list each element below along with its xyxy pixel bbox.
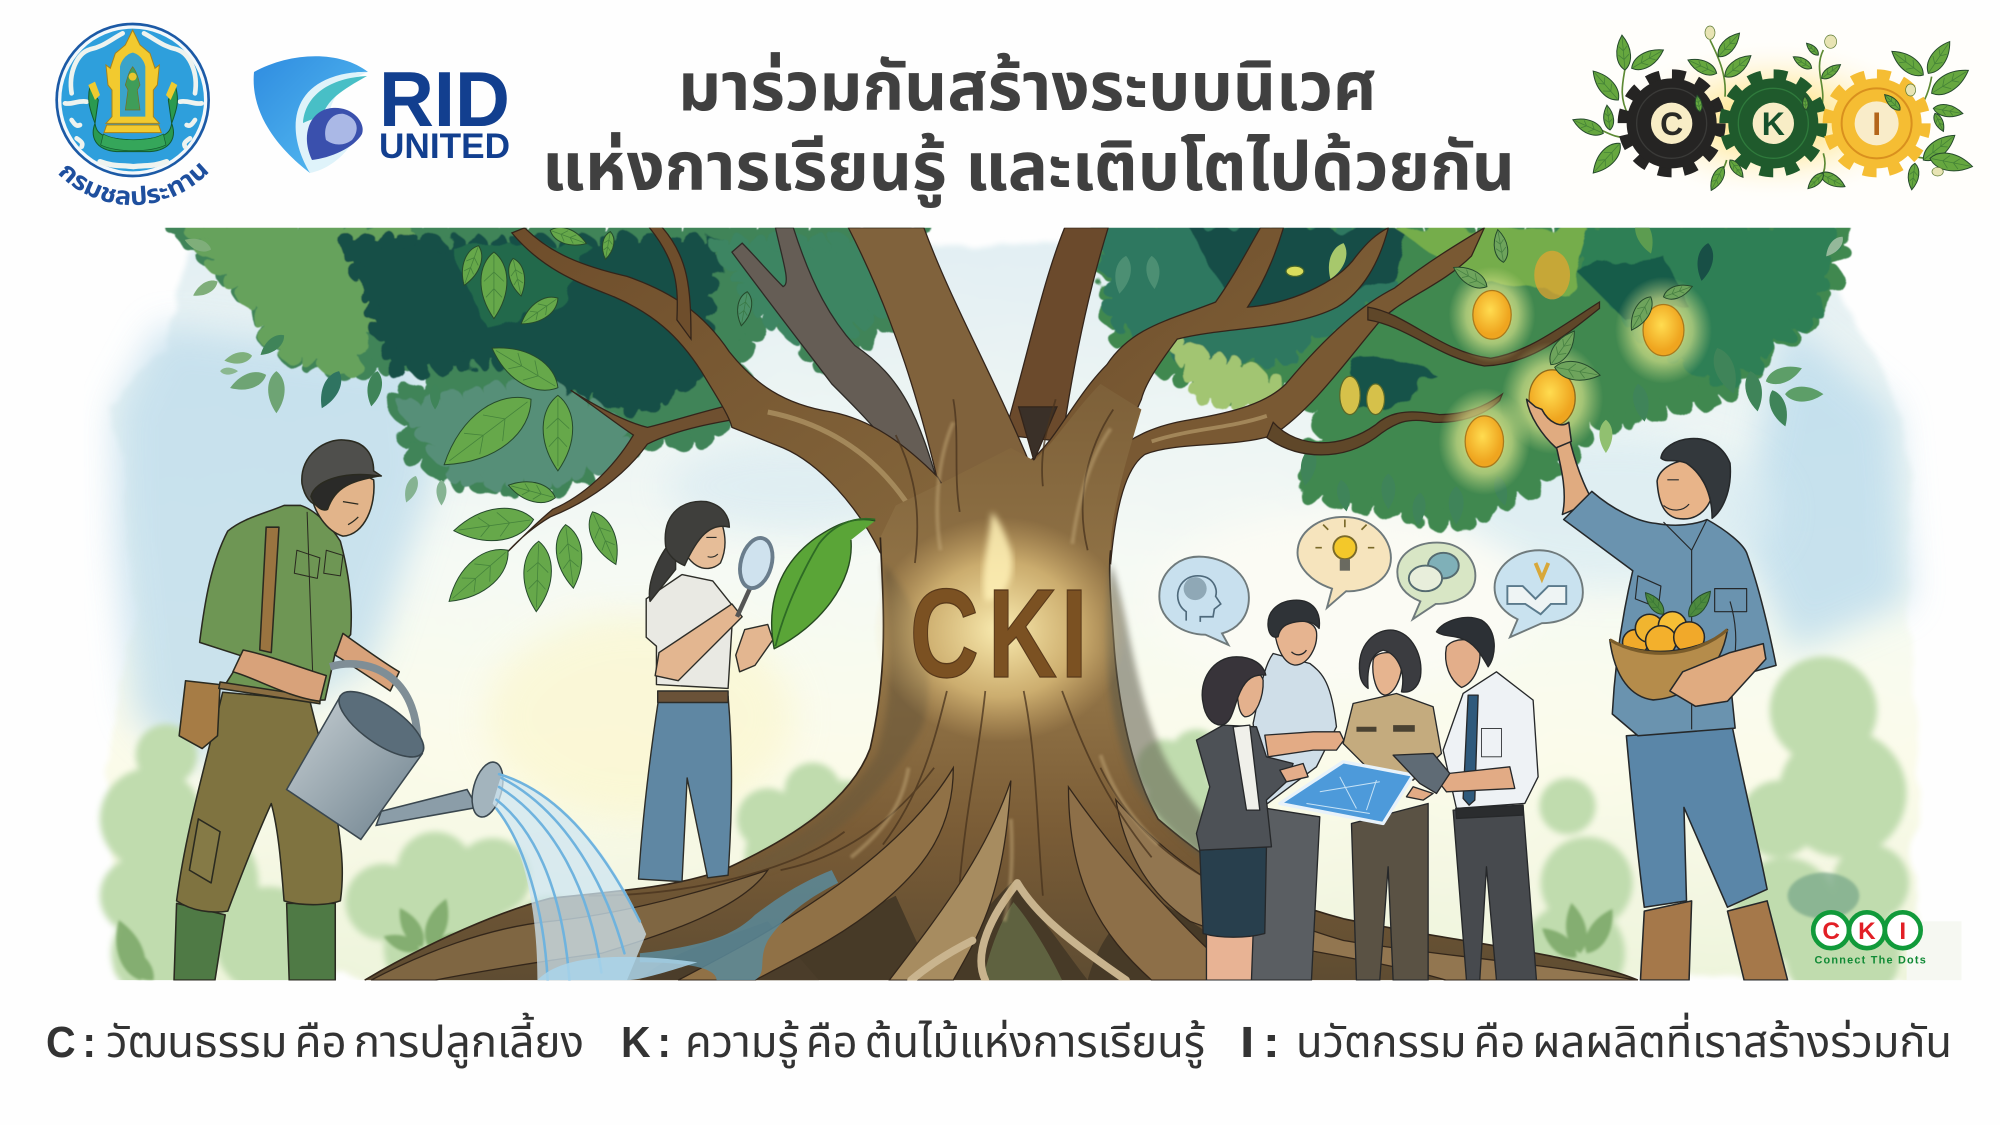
bubble: chat (1397, 543, 1475, 619)
foreground leaves (431, 223, 754, 613)
shirt (1564, 491, 1776, 736)
gear I: I (1872, 106, 1881, 142)
group of four colleagues (1196, 600, 1538, 980)
caption: C K I meanings (46, 1012, 1952, 1069)
gear C: C (1660, 106, 1683, 142)
face (311, 474, 374, 536)
title: มาร่วมกันสร้างระบบนิเวศ (678, 49, 1377, 125)
carved CKI (910, 562, 1088, 704)
water stream (493, 774, 697, 980)
gear K (1725, 75, 1822, 172)
shield icon (254, 56, 368, 173)
face and hair (681, 505, 725, 568)
ground between roots (756, 883, 1206, 980)
caption C: วัฒนธรรม คือ การปลูกเลี้ยง (106, 1012, 584, 1069)
caption K: K : (621, 1018, 671, 1067)
watering can (287, 664, 508, 839)
grass tufts (107, 873, 1859, 987)
blouse (646, 575, 733, 688)
hanging foliage dabs (183, 215, 1846, 526)
gear C (1623, 75, 1720, 172)
limb: left main branch (507, 225, 972, 553)
tree trunk and roots (365, 384, 1638, 980)
tool pouch (179, 681, 220, 749)
shirt (200, 505, 351, 700)
illustration: watercolour tree scene (100, 215, 1962, 1011)
RID wordmark: UNITED (379, 127, 510, 166)
man in pale shirt (1250, 600, 1344, 980)
pale rootlets (911, 883, 1126, 980)
arms (233, 650, 326, 701)
blue wet root (640, 870, 838, 980)
gear K: K (1762, 106, 1785, 142)
fruits (1286, 228, 1712, 495)
golden shrine (106, 30, 159, 123)
speech bubbles (1159, 517, 1583, 645)
seal caption: กรมชลประทาน (58, 162, 208, 206)
small CKI Connect The Dots logo: C (1822, 918, 1840, 945)
shaded sides (806, 564, 928, 841)
trunk body (365, 384, 1638, 980)
boots (174, 903, 335, 980)
small CKI Connect The Dots logo: I (1899, 918, 1906, 945)
small CKI Connect The Dots logo (1813, 912, 1962, 980)
logo: Royal Irrigation Department seal (55, 22, 210, 206)
naga serpents (89, 85, 177, 152)
limb: central trunk limbs (848, 228, 1388, 512)
buds (1705, 26, 1943, 176)
bubble: handshake (1495, 550, 1583, 637)
caption I: I : (1240, 1018, 1280, 1067)
title: แห่งการเรียนรู้ และเติบโตไปด้วยกัน (542, 129, 1515, 208)
title (542, 49, 1515, 208)
carved CKI: K (988, 562, 1057, 704)
trunk outlines (365, 537, 1638, 980)
limb: right main branch (1075, 228, 1600, 563)
magnifying glass (737, 589, 750, 617)
seal disc (55, 23, 210, 177)
basket with fruit (1610, 587, 1727, 700)
caption C: C : (46, 1018, 96, 1067)
blueprint (1280, 762, 1413, 823)
stems (1593, 40, 1947, 183)
ponytail (649, 537, 676, 601)
leaves (1570, 29, 1974, 193)
carved CKI: C (910, 562, 979, 704)
logo: RID United (254, 55, 510, 173)
carved CKI: I (1061, 562, 1088, 704)
logo: CKI gears with leaves (1560, 20, 1990, 210)
forearm holding basket (1670, 644, 1766, 706)
woman in dark suit (1196, 657, 1308, 980)
small CKI Connect The Dots logo: Connect The Dots (1814, 955, 1926, 967)
bubble: brain (1159, 557, 1249, 645)
jeans (1626, 728, 1767, 907)
canopy left (179, 228, 921, 486)
gear I (1828, 75, 1925, 172)
RID wordmark: RID (379, 55, 510, 143)
big leaf (772, 520, 875, 649)
man watering (174, 440, 399, 980)
raised arm (1556, 441, 1593, 514)
man in white shirt (1433, 617, 1538, 980)
bubble: light bulb (1298, 517, 1391, 608)
hair and cap (302, 440, 381, 505)
caption K: ความรู้ คือ ต้นไม้แห่งการเรียนรู้ (685, 1018, 1205, 1069)
bark lines (589, 399, 1216, 896)
white floral scrolls (65, 33, 202, 167)
jeans (639, 696, 731, 882)
hair (1661, 438, 1730, 518)
canopy right (1100, 228, 1843, 522)
small CKI Connect The Dots logo: K (1858, 918, 1876, 945)
caption I: นวัตกรรม คือ ผลผลิตที่เราสร้างร่วมกัน (1296, 1012, 1952, 1067)
roots (371, 768, 1638, 980)
glow (878, 524, 1120, 736)
arms (655, 604, 742, 681)
woman in tan uniform (1343, 630, 1441, 980)
boots (1640, 901, 1788, 980)
woman with magnifying glass (639, 501, 875, 882)
tablet (1393, 753, 1450, 793)
face (1657, 460, 1715, 519)
background bushes (100, 656, 1909, 1011)
man picking fruit (1527, 399, 1788, 980)
limb: grey back branch (731, 228, 936, 474)
sky wash (109, 243, 1919, 980)
trousers (177, 692, 342, 912)
